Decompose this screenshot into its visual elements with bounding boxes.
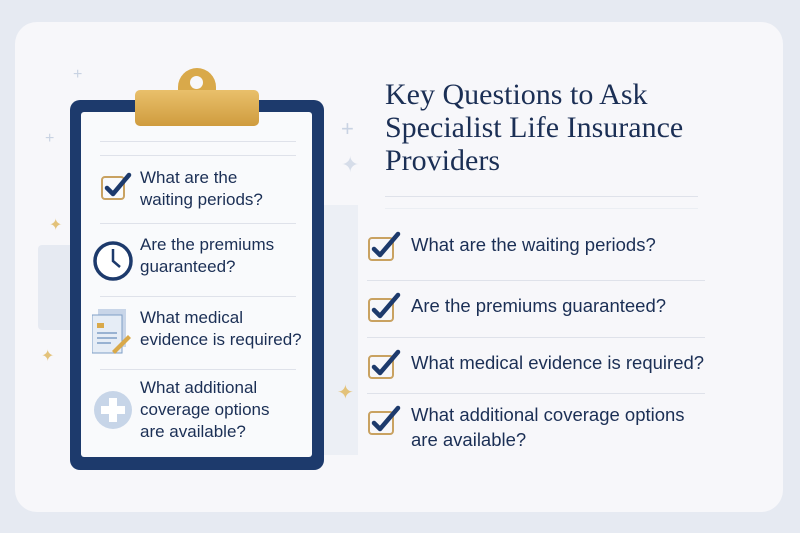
sparkles: ✦ bbox=[341, 152, 359, 177]
sparkles: ✦ bbox=[49, 217, 62, 234]
sparkles: + bbox=[73, 66, 82, 83]
clipboard item 1: What are the bbox=[140, 168, 237, 187]
title bbox=[385, 78, 683, 177]
clipboard item 3: What medical bbox=[140, 308, 243, 327]
clipboard item 1: waiting periods? bbox=[140, 190, 263, 209]
title: Specialist Life Insurance bbox=[385, 111, 683, 144]
clipboard item 2: Are the premiums bbox=[140, 235, 274, 254]
item 4: What additional coverage options bbox=[411, 404, 685, 425]
title: Key Questions to Ask bbox=[385, 78, 648, 111]
clipboard item 4: What additional bbox=[140, 378, 257, 397]
clipboard item 4 bbox=[94, 378, 269, 441]
clipboard item 2: guaranteed? bbox=[140, 257, 235, 276]
decorative panels bbox=[38, 245, 78, 330]
sparkles: + bbox=[341, 116, 354, 141]
sparkles: + bbox=[45, 130, 54, 147]
checklist bbox=[367, 232, 705, 450]
item 3: What medical evidence is required? bbox=[411, 352, 704, 373]
clip bbox=[135, 68, 259, 126]
title: Providers bbox=[385, 144, 500, 177]
clipboard item 1 bbox=[101, 168, 263, 209]
clipboard bbox=[70, 68, 324, 470]
item 4 bbox=[368, 404, 685, 450]
item 1: What are the waiting periods? bbox=[411, 234, 656, 255]
clipboard item 3 bbox=[92, 308, 302, 354]
item 2: Are the premiums guaranteed? bbox=[411, 295, 666, 316]
clipboard item 3: evidence is required? bbox=[140, 330, 302, 349]
clipboard item 4: are available? bbox=[140, 422, 246, 441]
item 4: are available? bbox=[411, 429, 526, 450]
sparkles: ✦ bbox=[41, 348, 54, 365]
clipboard item 2 bbox=[93, 235, 274, 281]
item 1 bbox=[368, 232, 656, 261]
item 3 bbox=[368, 350, 704, 379]
clipboard item 4: coverage options bbox=[140, 400, 269, 419]
sparkles bbox=[41, 66, 359, 404]
sparkles: ✦ bbox=[337, 382, 354, 404]
item 2 bbox=[368, 292, 666, 322]
